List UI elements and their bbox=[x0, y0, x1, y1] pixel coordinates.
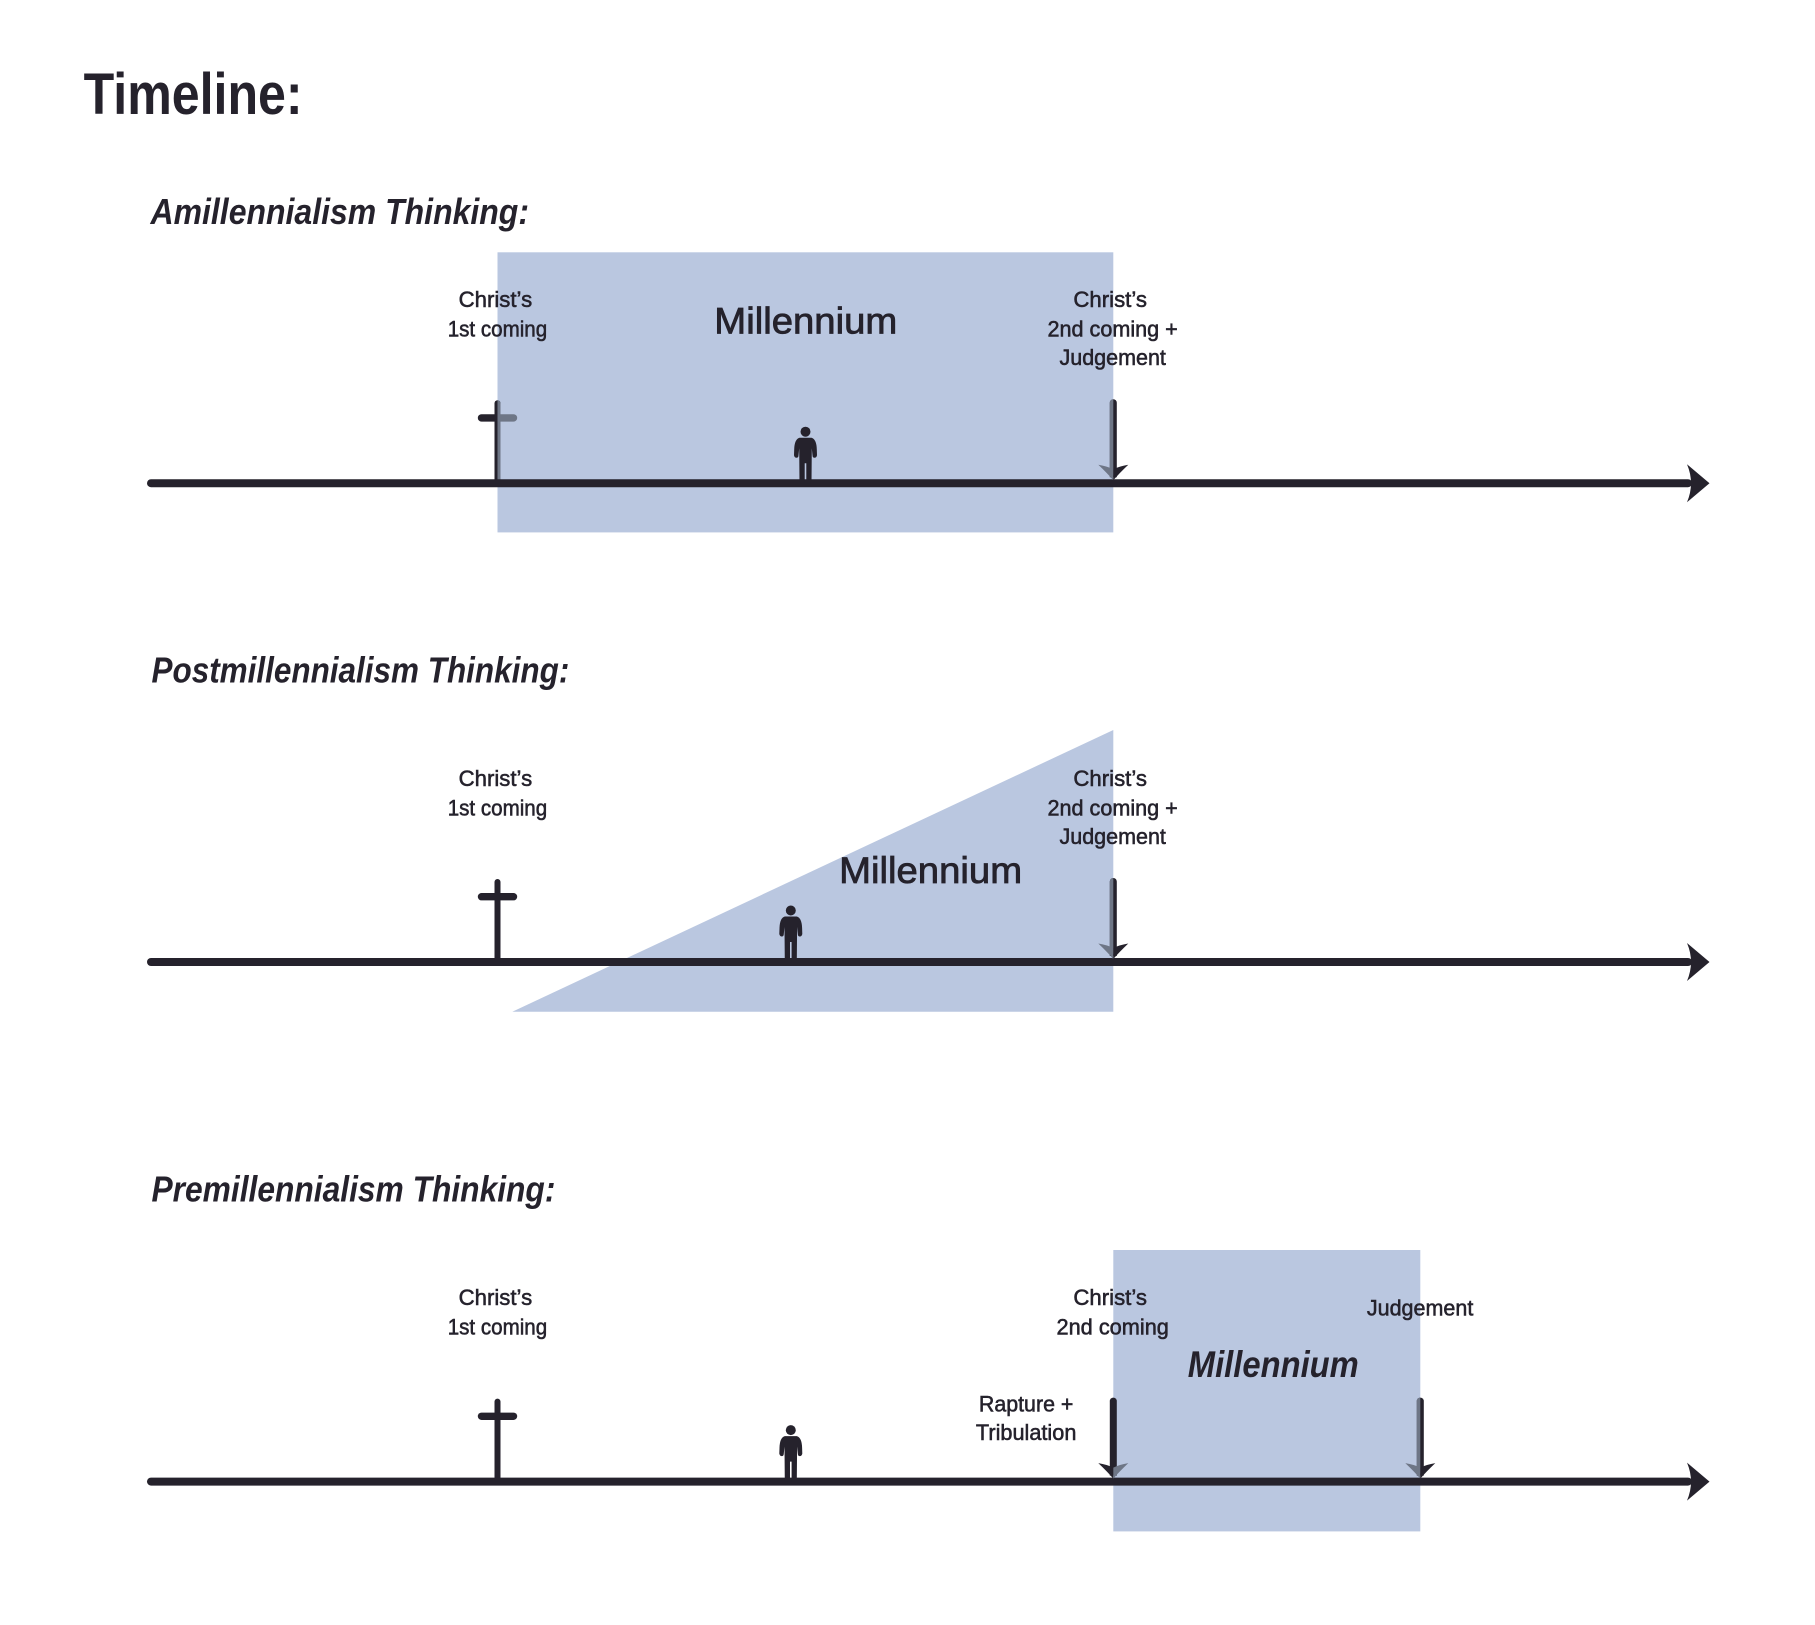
title: Timeline: bbox=[84, 62, 303, 127]
label: first coming bbox=[448, 287, 547, 341]
label: millennium: Millennium bbox=[714, 300, 897, 341]
icon: person bbox=[794, 427, 817, 483]
icon: down arrow bbox=[1098, 399, 1128, 480]
label: first coming: Christ’s bbox=[459, 766, 532, 791]
label: rapture and tribulation bbox=[976, 1392, 1076, 1445]
label: first coming bbox=[448, 1285, 547, 1340]
timeline arrow bbox=[147, 464, 1710, 502]
label: second coming and judgement: 2nd coming + bbox=[1048, 316, 1178, 341]
millennium wedge bbox=[512, 730, 1113, 1012]
panel: postmillennialism timeline bbox=[147, 650, 1710, 1012]
label: judgement: Judgement bbox=[1367, 1296, 1474, 1321]
panel: premillennialism timeline bbox=[147, 1168, 1710, 1531]
heading: premillennialism: Premillennialism Thinking: bbox=[152, 1168, 555, 1210]
label: second coming and judgement: Judgement bbox=[1060, 345, 1167, 370]
icon: cross bbox=[478, 879, 517, 962]
label: first coming: 1st coming bbox=[448, 795, 547, 820]
label: second coming and judgement bbox=[1048, 287, 1178, 370]
label: second coming and judgement: 2nd coming + bbox=[1048, 795, 1178, 820]
icon: down arrow bbox=[1098, 878, 1128, 959]
icon: person bbox=[779, 906, 802, 962]
label: first coming: Christ’s bbox=[459, 1285, 532, 1310]
icon: rapture arrow bbox=[1098, 1398, 1128, 1479]
label: second coming: Christ’s bbox=[1073, 1285, 1147, 1310]
panel: amillennialism timeline bbox=[147, 191, 1710, 532]
icon: cross bbox=[478, 1399, 517, 1482]
label: second coming: 2nd coming bbox=[1056, 1314, 1169, 1340]
label: first coming: 1st coming bbox=[448, 316, 547, 341]
label: millennium: Millennium bbox=[839, 850, 1022, 891]
label: rapture and tribulation: Tribulation bbox=[976, 1420, 1076, 1445]
heading: amillennialism: Amillennialism Thinking: bbox=[150, 191, 529, 232]
icon: cross bbox=[478, 400, 517, 483]
label: millennium: Millennium bbox=[1188, 1344, 1359, 1385]
icon: person bbox=[779, 1425, 802, 1482]
label: first coming bbox=[448, 766, 547, 820]
label: second coming and judgement: Christ’s bbox=[1073, 287, 1147, 312]
millennium block bbox=[498, 252, 1113, 532]
label: second coming and judgement bbox=[1048, 766, 1178, 849]
timeline arrow bbox=[147, 943, 1710, 981]
label: rapture and tribulation: Rapture + bbox=[979, 1392, 1073, 1417]
icon: judgement arrow bbox=[1405, 1398, 1435, 1479]
label: first coming: 1st coming bbox=[448, 1314, 547, 1340]
timeline arrow bbox=[147, 1463, 1710, 1501]
label: second coming bbox=[1056, 1285, 1169, 1340]
millennium block bbox=[1113, 1250, 1420, 1531]
label: second coming and judgement: Christ’s bbox=[1073, 766, 1147, 791]
label: first coming: Christ’s bbox=[459, 287, 532, 312]
label: second coming and judgement: Judgement bbox=[1060, 824, 1167, 849]
heading: postmillennialism: Postmillennialism Thinking: bbox=[152, 650, 569, 690]
